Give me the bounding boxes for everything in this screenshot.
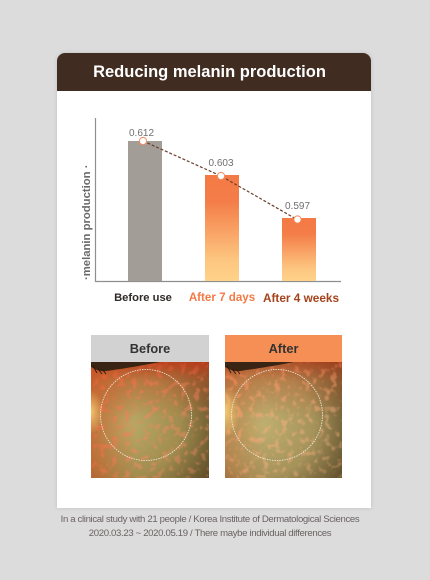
- photo: after: [212, 362, 342, 478]
- footnote: 2020.03.23 ~ 2020.05.19 / There maybe individual differences: [89, 528, 331, 539]
- panel: white card: [57, 53, 371, 508]
- dashed circle: [100, 370, 192, 460]
- after label: After: [269, 341, 298, 356]
- title: [57, 53, 371, 91]
- after label: [225, 335, 342, 362]
- value: 0.597: 0.597: [285, 201, 310, 212]
- before label: [91, 335, 209, 362]
- eyelash: [91, 362, 160, 371]
- title: Reducing melanin production: [93, 63, 326, 81]
- before label: Before: [130, 341, 170, 356]
- trend line: [143, 141, 297, 220]
- value: 0.612: 0.612: [129, 128, 154, 139]
- footnote: In a clinical study with 21 people / Korea Institute of Dermatological Sciences: [61, 514, 359, 525]
- eyelash: [225, 362, 294, 371]
- bar: after 4 weeks: [282, 218, 316, 281]
- y axis title: ·melanin production ·: [81, 165, 93, 280]
- bar: before use: [128, 141, 162, 281]
- label: after 7 days: After 7 days: [189, 291, 255, 304]
- axes: [96, 118, 341, 282]
- photos of skin: [91, 362, 342, 478]
- photo: before: [79, 362, 209, 478]
- bar: after 7 days: [205, 175, 239, 281]
- label: after 4 weeks: After 4 weeks: [263, 291, 339, 305]
- point: after 4 weeks: [294, 216, 301, 223]
- point: after 7 days: [217, 172, 225, 180]
- footnote: [61, 514, 360, 539]
- value: 0.603: 0.603: [208, 158, 234, 169]
- dashed circle: [232, 370, 322, 460]
- label: before use: Before use: [114, 292, 172, 304]
- point: before use: [139, 137, 147, 145]
